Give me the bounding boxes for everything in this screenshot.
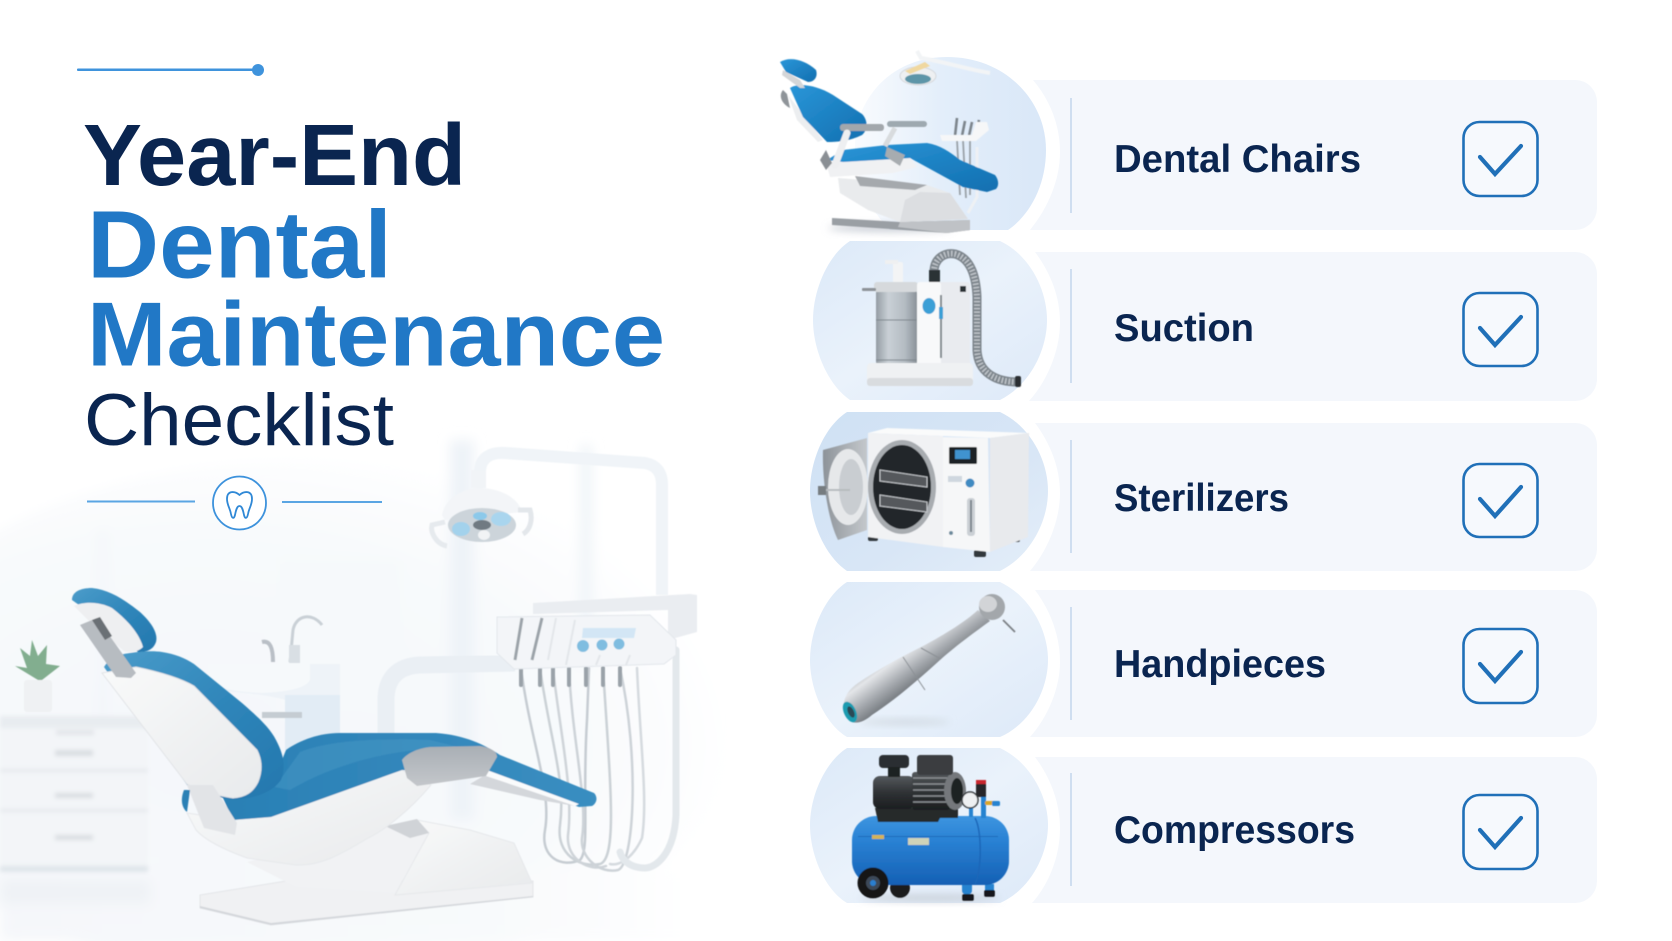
chair base plate xyxy=(200,881,533,925)
row 5 card: Compressors xyxy=(810,748,1597,903)
icon: handpiece photo xyxy=(840,594,1015,725)
headrest xyxy=(72,588,156,678)
checkbox xyxy=(1464,795,1538,869)
delivery unit control panel xyxy=(497,594,697,669)
tooth badge divider xyxy=(87,476,382,530)
label: Dental Chairs xyxy=(1114,138,1361,181)
icon: compressor photo xyxy=(852,755,1009,901)
title line: Maintenance: Maintenance xyxy=(87,284,665,386)
checkbox xyxy=(1464,122,1538,196)
row 2 card: Suction xyxy=(813,241,1597,401)
icon: tooth xyxy=(227,492,252,518)
chair pedestal xyxy=(247,819,532,895)
chair armrest xyxy=(402,746,497,786)
main dental chair xyxy=(72,588,596,925)
potted plant xyxy=(15,640,60,712)
icon: dental chair photo xyxy=(780,51,998,233)
label: Suction xyxy=(1114,307,1254,350)
clinic background scene xyxy=(0,440,740,941)
label: Handpieces xyxy=(1114,643,1326,686)
row 4 card: Handpieces xyxy=(810,582,1597,737)
title line: Year-End: Year-End xyxy=(83,107,466,204)
sink and faucets xyxy=(208,617,340,750)
footrest underside xyxy=(470,775,575,806)
icon: sterilizer photo xyxy=(818,428,1029,557)
chair seat cushion xyxy=(223,733,596,820)
row 1 card: Dental Chairs xyxy=(780,51,1597,233)
cabinet xyxy=(0,716,150,872)
checkbox xyxy=(1464,293,1538,366)
chair bracket xyxy=(187,785,237,835)
dental hoses xyxy=(521,650,676,871)
row 3 card: Sterilizers xyxy=(810,412,1597,571)
title line: Checklist: Checklist xyxy=(84,380,394,461)
chair backrest cushion xyxy=(104,651,284,800)
chair backrest white shell xyxy=(102,667,261,798)
label: Sterilizers xyxy=(1114,477,1289,520)
icon: suction unit photo xyxy=(862,254,1021,387)
divider line top xyxy=(77,64,264,76)
chair body shell xyxy=(187,770,431,865)
label: Compressors xyxy=(1114,809,1355,852)
title line: Dental: Dental xyxy=(87,192,392,298)
checkbox xyxy=(1464,464,1538,537)
overhead lamp xyxy=(432,453,662,595)
checkbox xyxy=(1464,629,1538,703)
title xyxy=(83,107,665,461)
delivery unit arm xyxy=(386,663,515,735)
